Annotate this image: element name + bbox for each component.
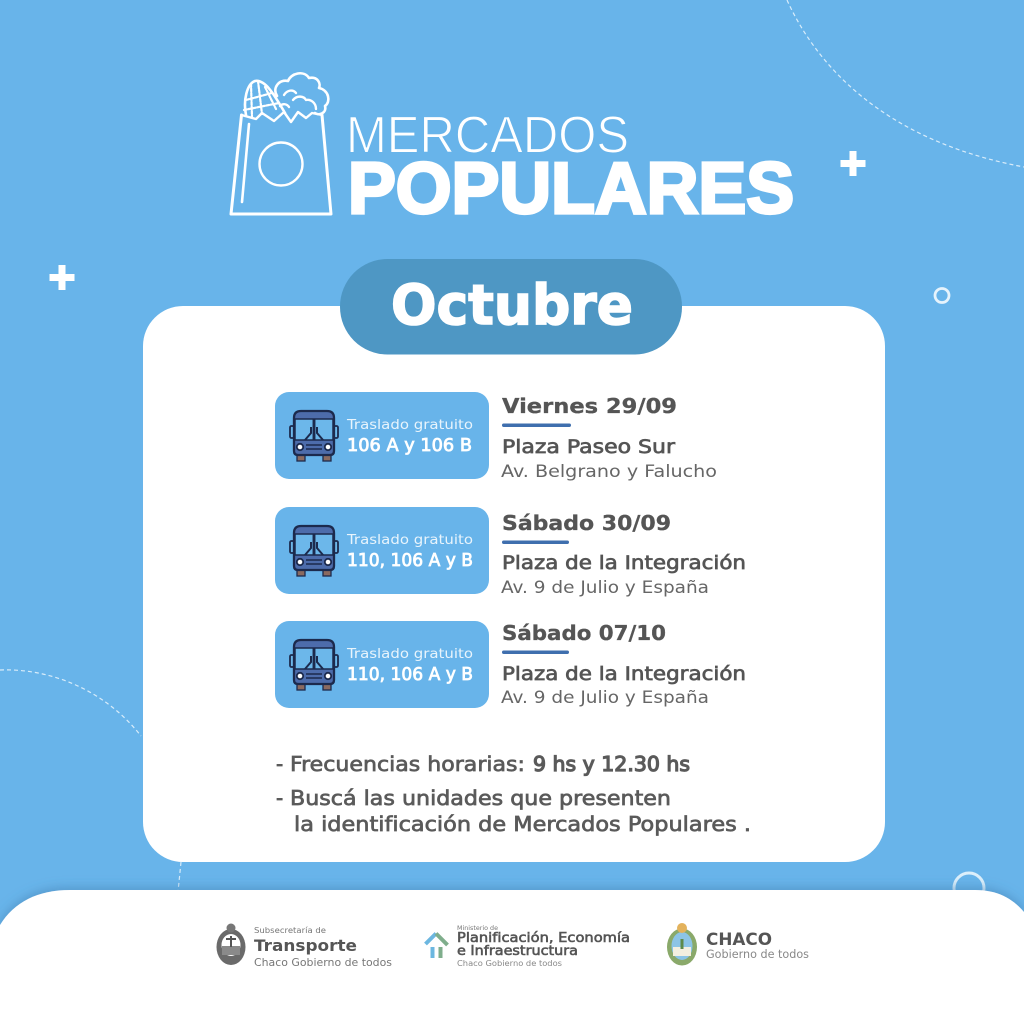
row 2: transport badge: Traslado gratuito <box>346 533 473 548</box>
title: POPULARES: POPULARES <box>348 149 794 229</box>
text: Transporte: Subsecretaría de <box>254 926 326 935</box>
logo: house <box>426 934 448 958</box>
row 2: details: Plaza de la Integración <box>502 552 746 574</box>
row 3: transport badge: 110, 106 A y B <box>347 665 473 685</box>
text: CHACO: CHACO <box>706 930 772 950</box>
logo: shopping bag <box>231 73 331 214</box>
row 3: transport badge: Traslado gratuito <box>346 647 473 662</box>
title: MERCADOS: MERCADOS <box>346 106 629 164</box>
row 1: details: Viernes 29/09 <box>502 394 677 418</box>
pill: Octubre: Octubre <box>391 273 633 337</box>
text: Transporte <box>254 926 392 969</box>
notes: 9 hs y 12.30 hs <box>533 752 690 776</box>
row 3: transport badge <box>275 621 489 708</box>
panel: footer <box>0 890 1024 1024</box>
row 1: details <box>501 394 717 482</box>
notes: - <box>276 752 283 776</box>
pill: Octubre <box>340 259 682 354</box>
panel: white card <box>143 306 885 862</box>
text: Transporte: Chaco Gobierno de todos <box>254 956 392 969</box>
text: Ministerio: Ministerio de <box>457 925 498 932</box>
row 2: transport badge: 110, 106 A y B <box>347 551 473 571</box>
text: Transporte: Transporte <box>254 936 357 955</box>
row 3: details: Plaza de la Integración <box>502 663 746 685</box>
row 3: details <box>501 621 746 708</box>
notes: Frecuencias horarias: <box>290 752 525 776</box>
notes <box>276 752 751 836</box>
row 3: details: Sábado 07/10 <box>502 621 666 645</box>
row 1: transport badge: 106 A y 106 B <box>347 436 472 456</box>
row 1: details: Av. Belgrano y Falucho <box>501 462 717 482</box>
text: CHACO <box>706 930 809 961</box>
icon: ring right <box>935 288 949 302</box>
row 2: transport badge <box>275 507 489 594</box>
notes: Buscá las unidades que presenten <box>290 786 671 810</box>
row 2: details <box>501 511 746 598</box>
row 1: transport badge <box>275 392 489 479</box>
icon: plus left <box>50 265 74 290</box>
row 1: transport badge: Traslado gratuito <box>346 418 473 433</box>
text: CHACO: Gobierno de todos <box>706 947 809 961</box>
logo: Chaco shield <box>667 923 697 966</box>
row 1: details: Plaza Paseo Sur <box>502 436 675 458</box>
text: Ministerio: Planificación, Economía <box>457 930 630 946</box>
text: Ministerio <box>457 925 630 968</box>
icon: ring footer <box>954 873 984 903</box>
row 2: details: Sábado 30/09 <box>502 511 671 535</box>
row 2: details: Av. 9 de Julio y España <box>501 578 709 598</box>
logo: Transporte shield <box>216 924 246 965</box>
text: Ministerio: Chaco Gobierno de todos <box>457 959 562 968</box>
notes: la identificación de Mercados Populares . <box>294 812 751 836</box>
row 3: details: Av. 9 de Julio y España <box>501 688 709 708</box>
text: Ministerio: e Infraestructura <box>457 943 578 959</box>
icon: plus top right <box>840 151 866 176</box>
notes: - <box>276 786 283 810</box>
